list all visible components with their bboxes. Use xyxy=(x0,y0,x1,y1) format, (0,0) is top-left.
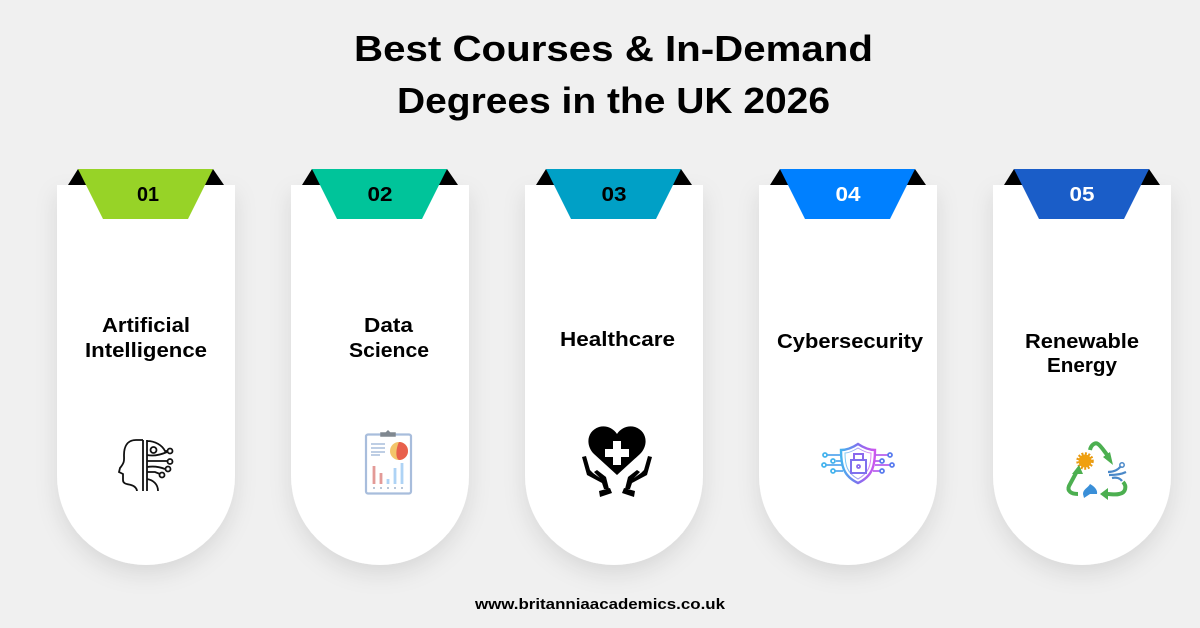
number tab 04 xyxy=(780,169,915,219)
icon: heart in hands xyxy=(582,426,652,497)
tab ears xyxy=(536,169,692,185)
number tab 02 xyxy=(312,169,447,219)
tab ears xyxy=(68,169,224,185)
panel: Artificial Intelligence xyxy=(57,169,235,565)
heading: Data Science: Science xyxy=(349,340,429,362)
icon: shield with lock xyxy=(822,444,894,483)
number tab 04: 04 xyxy=(836,184,861,206)
heading: Renewable Energy xyxy=(1025,331,1139,377)
tab ears xyxy=(1004,169,1160,185)
icon: clipboard chart xyxy=(366,431,411,494)
icon: recycling energy xyxy=(1068,443,1126,500)
tab ears xyxy=(770,169,926,185)
number tab 01 xyxy=(78,169,213,219)
heading: Healthcare: Healthcare xyxy=(560,329,675,351)
number tab 03 xyxy=(546,169,681,219)
title xyxy=(354,28,873,121)
number tab 01: 01 xyxy=(137,184,159,206)
title: Best Courses & In-Demand xyxy=(354,28,873,69)
title: Degrees in the UK 2026 xyxy=(397,80,830,121)
number tab 05: 05 xyxy=(1070,184,1094,206)
panel: Renewable Energy xyxy=(993,169,1171,565)
heading: Data Science xyxy=(349,315,429,362)
heading: Cybersecurity: Cybersecurity xyxy=(777,331,924,353)
panel: Healthcare xyxy=(525,169,703,565)
heading: Artificial Intelligence xyxy=(85,315,207,362)
panel: Data Science xyxy=(291,169,469,565)
heading: Data Science: Data xyxy=(364,315,414,337)
heading: Renewable Energy: Renewable xyxy=(1025,331,1139,353)
footer url: www.britanniaacademics.co.uk xyxy=(474,596,726,613)
icon: AI head xyxy=(119,440,172,491)
heading: Renewable Energy: Energy xyxy=(1047,355,1118,377)
tab ears xyxy=(302,169,458,185)
heading: Artificial Intelligence: Artificial xyxy=(102,315,190,337)
number tab 02: 02 xyxy=(368,184,392,206)
heading: Artificial Intelligence: Intelligence xyxy=(85,340,207,362)
panel: Cybersecurity xyxy=(759,169,937,565)
number tab 03: 03 xyxy=(602,184,626,206)
number tab 05 xyxy=(1014,169,1149,219)
